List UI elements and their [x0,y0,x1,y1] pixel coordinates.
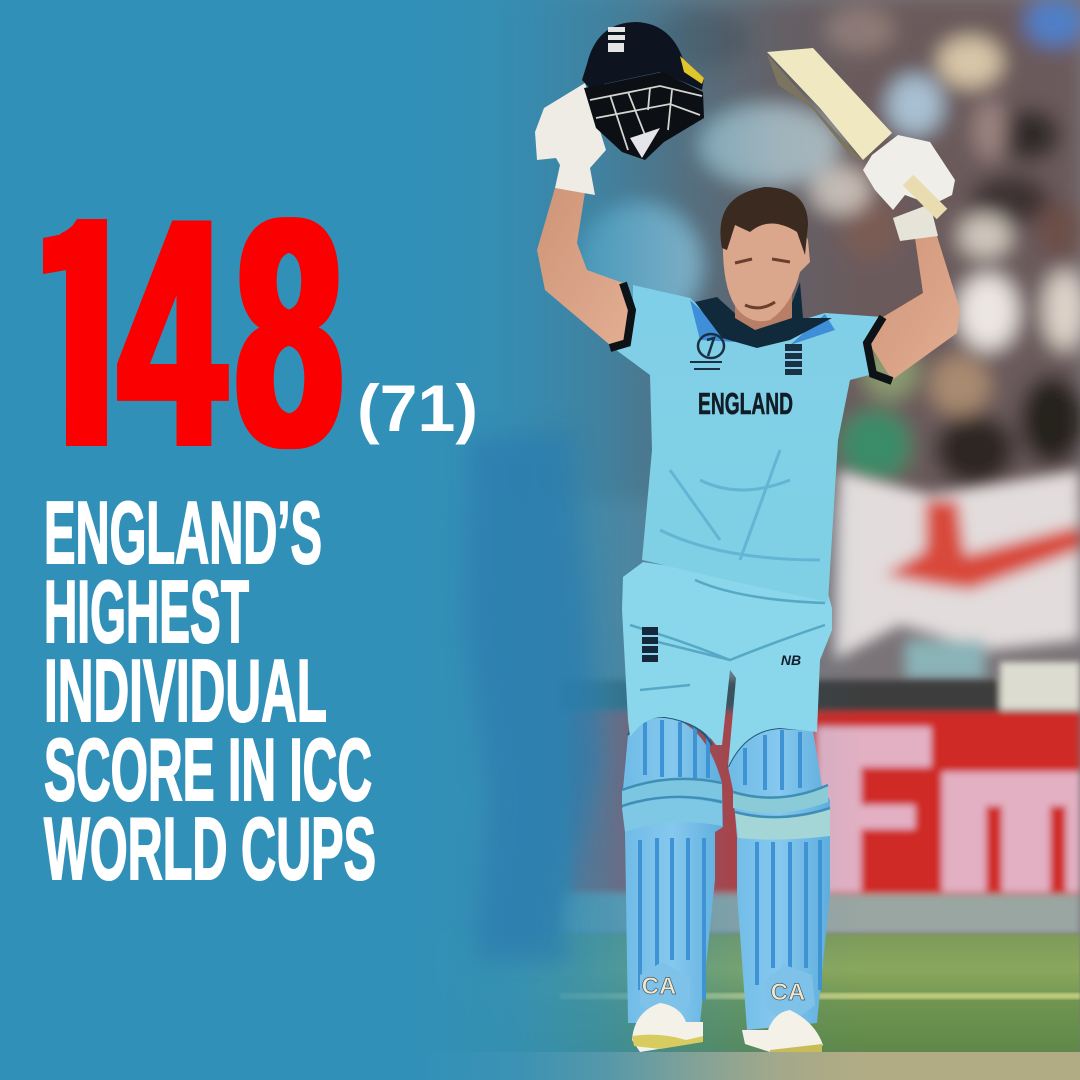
right glove [863,135,955,210]
shoes [632,1003,823,1052]
England flag banner [835,470,1080,680]
shirt folds [660,450,820,560]
collar [695,282,832,348]
shoulder pattern [690,300,835,345]
right wrist cuff [893,204,938,241]
world cup badge [690,334,724,369]
advertising board [560,662,1080,934]
digit one body [43,219,107,446]
trousers [622,562,832,767]
balls faced: (71) [357,371,478,445]
left glove [535,83,606,195]
headline: HIGHEST [44,562,249,661]
grass [400,934,1080,1052]
helmet [582,22,704,160]
trouser logo: NB [781,652,801,668]
shirt text: ENGLAND [698,386,793,421]
headline [44,483,376,898]
bat [767,48,892,160]
digits four and eight: 4 [119,154,226,513]
score 148 [43,217,342,450]
raised right arm [870,236,960,380]
pad logos: CA [642,973,676,1000]
hair [720,187,808,255]
bat edge [767,54,863,162]
knee and shin pads [622,717,830,1030]
shirt [612,285,883,602]
player [535,22,960,1052]
sleeve trims [610,283,632,348]
digits four and eight [119,154,343,513]
crowd [500,0,1080,500]
headline: INDIVIDUAL [44,641,327,740]
headline: WORLD CUPS [44,799,376,898]
blurred background fielder [465,430,600,962]
bat handle [908,180,942,214]
neck and face [723,215,810,330]
england crest [785,344,802,375]
digits four and eight: 8 [235,154,343,513]
trouser folds [630,580,825,690]
headline: ENGLAND’S [44,483,322,582]
right pad logo: CA [771,979,805,1006]
trouser crest [642,627,658,662]
headline: SCORE IN ICC [44,720,372,819]
digit one: 1 [28,152,140,513]
raised left arm [537,188,632,345]
